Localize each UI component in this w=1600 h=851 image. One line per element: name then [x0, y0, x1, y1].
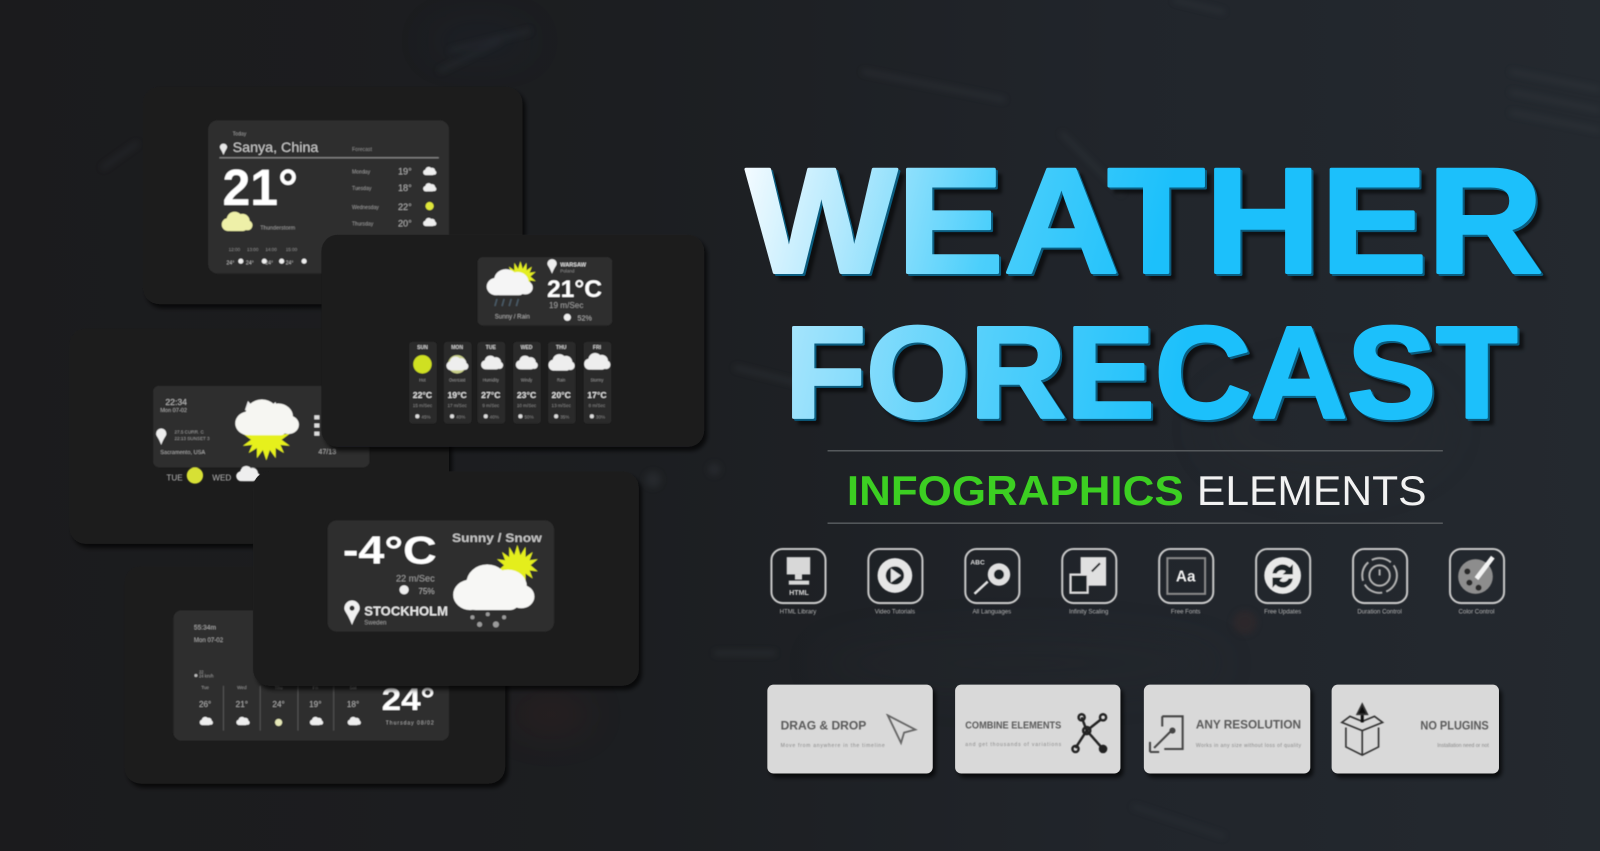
icon: infinity scaling [1070, 557, 1106, 593]
panel: Stockholm card [253, 471, 639, 686]
Stockholm widget: -4°C [343, 529, 437, 572]
icon: free fonts: Aa [1176, 569, 1196, 586]
weekly forecast inner widget: 24° [382, 681, 435, 717]
feature icon row [771, 549, 1504, 615]
Warsaw six-day forecast columns: Windy [521, 378, 533, 383]
icon labels: Free Fonts [1171, 608, 1200, 615]
weekly forecast inner widget: 24° [272, 700, 285, 709]
Sanya inner widget: Monday [352, 169, 371, 175]
feature card: Any Resolution [1144, 685, 1310, 773]
weekly forecast inner widget: 18° [347, 700, 359, 709]
Sacramento inner widget: 22:34 [165, 397, 187, 407]
Warsaw current weather widget: WARSAW [560, 262, 587, 268]
weekly forecast inner widget: Mon 07-02 [194, 637, 224, 644]
weekly forecast inner widget: Fri [313, 685, 318, 690]
icon: free updates [1264, 557, 1301, 594]
Warsaw six-day forecast columns: 17 m/Sec [447, 403, 468, 408]
Warsaw six-day forecast columns: 35% [560, 414, 569, 419]
Sanya inner widget: 21° [222, 159, 298, 216]
feature card: No Plugins [1332, 685, 1499, 773]
Sanya inner widget: Thunderstorm [260, 226, 295, 232]
Warsaw six-day forecast columns: MON [451, 345, 463, 351]
icon labels: Duration Control [1357, 608, 1402, 615]
feature card: Combine Elements [955, 685, 1120, 773]
icon labels: Infinity Scaling [1069, 608, 1108, 615]
Warsaw current weather widget: 21°C [547, 276, 602, 303]
icon: cursor [888, 715, 915, 743]
Warsaw six-day forecast columns: 22°C [413, 390, 433, 400]
Stockholm widget: Sunny / Snow [452, 531, 542, 545]
Warsaw current weather widget: 19 m/Sec [549, 301, 583, 310]
Warsaw six-day forecast columns: 23°C [517, 390, 537, 400]
Sanya inner widget: Thursday [352, 222, 374, 228]
Warsaw six-day forecast columns: 8 m/Sec [589, 403, 606, 408]
Sanya inner widget: 19° [398, 166, 412, 176]
icon: color control [1458, 557, 1493, 594]
weekly forecast inner widget: 55:34m [194, 625, 216, 632]
Sacramento inner widget: WED [212, 474, 231, 483]
Warsaw six-day forecast columns: SUN [417, 345, 428, 351]
background coloured glows [429, 26, 1449, 733]
icon: HTML library [787, 557, 810, 597]
icon: all languages [970, 559, 1010, 594]
Warsaw six-day forecast columns: 27°C [481, 390, 501, 400]
weekly forecast inner widget: 19° [309, 700, 321, 709]
Sanya inner widget: 24° [286, 260, 293, 266]
title: FORECAST: FORECAST [787, 301, 1519, 447]
feature card: Any Resolution: Works in any size without loss of quality [1196, 743, 1301, 749]
Warsaw six-day forecast columns: Humidity [483, 378, 500, 383]
Warsaw current weather widget: Poland [560, 268, 575, 273]
icon: HTML library: HTML [789, 589, 810, 597]
icon labels [780, 608, 1495, 615]
icon: nodes [1072, 714, 1106, 752]
weekly forecast inner widget: 24 km/h [199, 674, 214, 679]
Warsaw six-day forecast columns: 9 m/Sec [482, 403, 500, 408]
Warsaw six-day forecast columns: Hot [419, 378, 426, 383]
Sacramento inner widget: 22:13 SUNSET 3 [175, 436, 210, 441]
weekly forecast inner widget: Sat [350, 685, 357, 690]
subtitle: Infographics Elements: ELEMENTS [1197, 467, 1427, 514]
Warsaw six-day forecast columns: Stormy [590, 378, 604, 383]
Sanya inner widget: Tuesday [352, 186, 372, 192]
Sanya inner widget: 15:00 [286, 247, 298, 252]
Warsaw six-day forecast columns: 40% [490, 414, 499, 419]
icon labels: Color Control [1459, 608, 1495, 615]
Warsaw six-day forecast columns: 50% [524, 414, 534, 419]
icon labels: Free Updates [1264, 608, 1301, 615]
Sanya inner widget: Sanya, China [233, 140, 318, 156]
Sanya inner widget: 18° [398, 183, 412, 193]
Sacramento inner widget: 27.5 CURR. C [175, 430, 204, 435]
icon: duration control [1362, 558, 1397, 593]
Warsaw six-day forecast columns: 19°C [447, 390, 468, 400]
icon: all languages: ABC [970, 559, 985, 566]
icon: video tutorials [878, 558, 912, 593]
Warsaw six-day forecast columns: Overcast [449, 378, 466, 383]
Warsaw six-day forecast columns [409, 342, 611, 423]
Stockholm widget: STOCKHOLM [364, 603, 448, 618]
title: FORECAST: FORECAST [785, 299, 1517, 445]
Sanya inner widget: Today [233, 132, 247, 138]
title: WEATHER: WEATHER [752, 143, 1549, 311]
feature card: Drag & Drop [767, 685, 933, 773]
Sacramento inner widget: TUE [166, 474, 183, 483]
subtitle: Infographics Elements: INFOGRAPHICS [847, 467, 1184, 514]
icon: resize [1150, 716, 1183, 752]
Warsaw six-day forecast columns: 30% [596, 414, 605, 419]
Warsaw six-day forecast columns: Rain [557, 378, 565, 383]
icon labels: Video Tutorials [875, 608, 915, 615]
Warsaw six-day forecast columns: WED [521, 345, 533, 351]
Sacramento inner widget [153, 386, 369, 484]
weekly forecast inner widget: 26° [199, 700, 211, 709]
Sanya inner widget: 13:00 [247, 247, 259, 252]
icon labels: HTML Library [780, 608, 817, 615]
feature card: Combine Elements: COMBINE ELEMENTS [965, 721, 1062, 732]
Sanya inner widget: Wednesday [352, 205, 379, 211]
weekly forecast inner widget: Wed [237, 685, 247, 690]
Warsaw six-day forecast columns: TUE [486, 345, 497, 351]
Warsaw six-day forecast columns: 17°C [587, 390, 607, 400]
feature card: Any Resolution: ANY RESOLUTION [1196, 718, 1301, 732]
weekly forecast inner widget [173, 610, 449, 741]
subtitle: Infographics Elements [847, 467, 1427, 514]
Sacramento inner widget: 47/13 [318, 448, 336, 456]
feature card: Combine Elements: and get thousands of variations [965, 742, 1062, 748]
feature card: Drag & Drop: Move from anywhere in the timeline [781, 743, 885, 749]
Sanya inner widget: 20° [398, 219, 412, 229]
Sacramento inner widget: Mon 07-02 [160, 408, 187, 414]
Warsaw six-day forecast columns: 13 m/Sec [552, 403, 572, 408]
Warsaw current weather widget: 52% [578, 314, 592, 322]
Sanya inner widget: Forecast [352, 147, 372, 153]
panel: Sacramento card [69, 329, 449, 544]
feature card: No Plugins: Installation need or not [1437, 743, 1489, 749]
title: WEATHER: WEATHER [748, 138, 1545, 306]
Sanya inner widget [208, 120, 449, 273]
Sanya inner widget: 22° [398, 202, 412, 212]
icon: open box with arrow [1342, 704, 1383, 755]
Sanya inner widget: 24° [246, 260, 254, 266]
title: WEATHER: WEATHER [746, 136, 1543, 304]
weekly forecast inner widget: 22 [199, 669, 204, 674]
Warsaw six-day forecast columns: FRI [593, 345, 602, 351]
weekly forecast inner widget: 21° [236, 700, 248, 709]
Sacramento inner widget: Sacramento, USA [160, 450, 205, 456]
Warsaw six-day forecast columns: 15 m/Sec [413, 403, 433, 408]
Sanya inner widget: 14:00 [265, 247, 277, 252]
weekly forecast inner widget: Thu [275, 685, 283, 690]
Warsaw six-day forecast columns: 10 m/Sec [517, 403, 537, 408]
panel: Warsaw card [321, 235, 704, 447]
icon: free fonts [1167, 558, 1205, 594]
icon labels: All Languages [972, 608, 1011, 615]
Warsaw current weather widget [478, 257, 612, 326]
panel: Friday temperatures card [125, 566, 505, 784]
Stockholm widget [328, 520, 554, 632]
Sanya inner widget: 12:00 [229, 247, 240, 252]
Sanya inner widget: 24° [265, 260, 273, 266]
Warsaw current weather widget: Sunny / Rain [495, 313, 530, 320]
Warsaw six-day forecast columns: 20°C [552, 390, 572, 400]
Sanya inner widget: 24° [227, 260, 234, 266]
Stockholm widget: Sweden [364, 619, 386, 626]
Stockholm widget: 75% [418, 587, 435, 596]
weekly forecast inner widget: Thursday 08/02 [386, 720, 434, 726]
Warsaw six-day forecast columns: THU [556, 345, 567, 351]
title: FORECAST: FORECAST [791, 305, 1523, 451]
feature card: Drag & Drop: DRAG & DROP [781, 719, 866, 733]
Warsaw six-day forecast columns: 45% [421, 414, 431, 419]
feature card: No Plugins: NO PLUGINS [1420, 719, 1489, 733]
Stockholm widget: 22 m/Sec [396, 574, 435, 584]
Warsaw six-day forecast columns: 40% [456, 414, 465, 419]
weekly forecast inner widget: Tue [201, 685, 209, 690]
panel: Sanya card [143, 87, 522, 304]
